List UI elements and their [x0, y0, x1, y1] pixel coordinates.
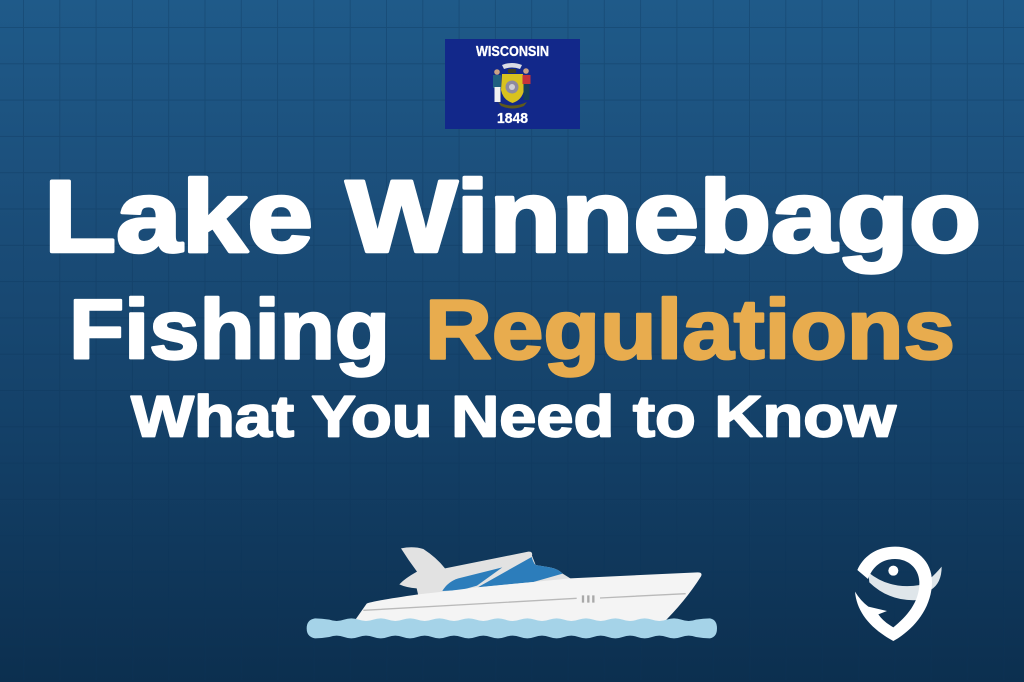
hull stripe [363, 594, 686, 610]
heading word: Regulations: Regulations [425, 282, 955, 376]
flag seal [493, 63, 530, 108]
logo fish body band and tail [868, 567, 942, 600]
flag text: state name: WISCONSIN [476, 44, 549, 60]
subtitle: What You Need to Know [131, 384, 897, 450]
logo hook outline [855, 547, 932, 641]
cabin windows [442, 567, 502, 591]
icon: Wisconsin flag [445, 39, 580, 129]
icon: fish hook logo [855, 547, 942, 641]
flag text: year: 1848 [497, 110, 528, 127]
boat hull [352, 572, 702, 625]
heading word: Fishing: Fishing [69, 282, 390, 376]
boat cabin and fin [399, 547, 572, 598]
hull vents [583, 595, 593, 603]
logo eye [888, 566, 898, 576]
icon: motor yacht on waves [307, 547, 717, 638]
heading: Fishing Regulations [69, 282, 955, 376]
title: Lake Winnebago: Lake Winnebago [44, 160, 981, 274]
waves [307, 618, 717, 638]
